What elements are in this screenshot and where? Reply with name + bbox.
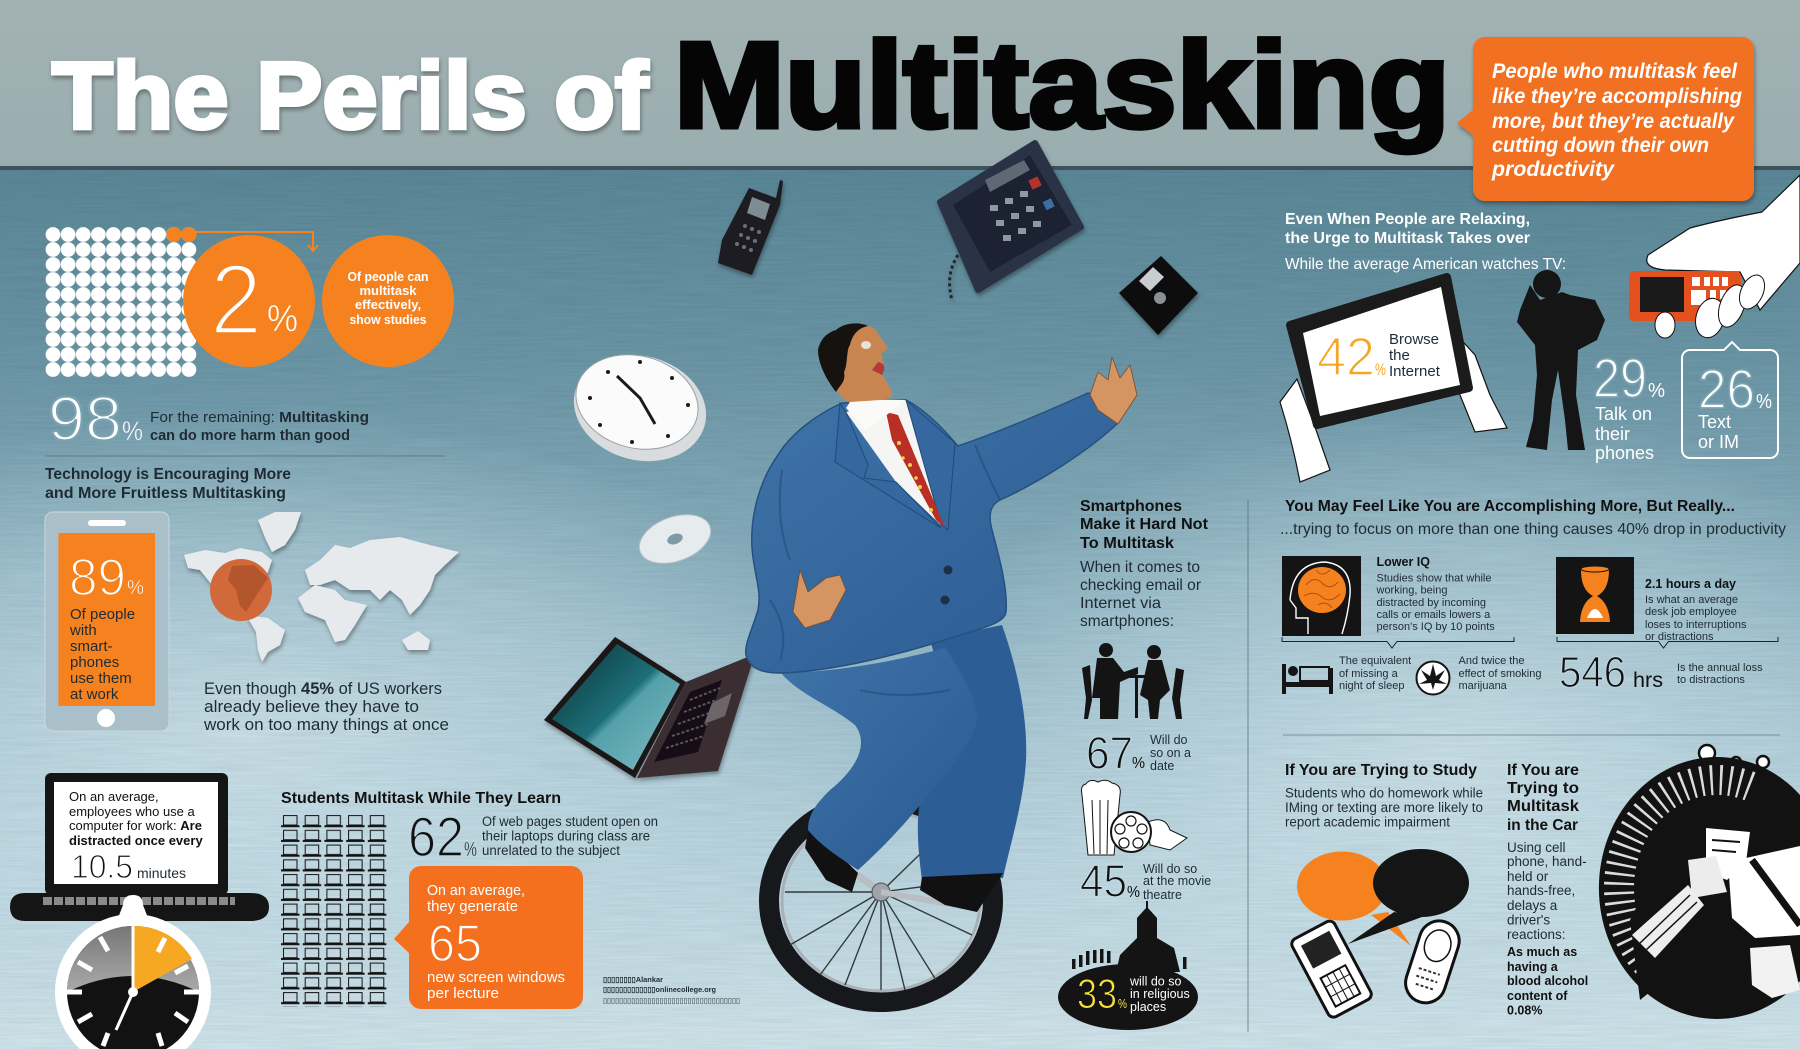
98 percent: % <box>122 416 143 446</box>
panel: multitask in the car: Multitask <box>1507 798 1579 815</box>
panel: smartphones: checking email or <box>1080 577 1202 594</box>
panel: multitask in the car: delays a <box>1507 898 1558 913</box>
bracket <box>1557 637 1778 648</box>
buttons <box>940 566 952 604</box>
stat: 45 percent: 45 <box>1080 856 1127 906</box>
stat: 26 percent box: % <box>1756 391 1772 413</box>
icon: smartphone 89 percent: use them <box>70 670 132 687</box>
icon: popcorn and film reel <box>1082 780 1187 855</box>
credits: ▯▯▯▯▯▯▯▯▯▯▯▯▯▯▯▯▯▯▯▯▯▯▯▯▯▯▯▯▯▯▯▯▯▯ <box>603 996 740 1005</box>
text: 2.1 hours a day <box>1645 577 1747 643</box>
callout: people who multitask: productivity <box>1491 158 1615 181</box>
stat: 546 hrs: to distractions <box>1677 674 1745 686</box>
panel: multitask in the car: If You are <box>1507 762 1579 779</box>
icon: laptop distraction: 10.5 <box>71 848 133 885</box>
back leg <box>918 625 1026 880</box>
panel: students multitask <box>281 790 658 1009</box>
stat: 29 percent <box>1593 347 1665 463</box>
icon: tablet with hands: Internet <box>1389 363 1441 380</box>
panel: multitask in the car: hands-free, <box>1507 883 1575 898</box>
text: 45 percent of US workers: work on too many things at once <box>203 715 449 734</box>
icon: smartphone 89 percent: with <box>69 622 97 639</box>
wheel <box>769 800 993 1002</box>
icon: laptop distraction <box>10 773 269 921</box>
tie <box>886 412 945 528</box>
icon: smartphone 89 percent: 89 <box>69 549 126 607</box>
text: missing sleep <box>1339 655 1411 692</box>
icon: smartphone 89 percent <box>45 512 169 731</box>
icon: tablet with hands: % <box>1375 360 1386 379</box>
icon: laptop distraction: computer for work: Are <box>69 818 202 833</box>
panel: technology heading: Technology is Encouraging More <box>45 466 291 483</box>
98 percent: For the remaining: Multitasking <box>150 409 369 426</box>
shirt <box>846 400 941 525</box>
icon: couple on a date <box>1082 643 1184 719</box>
dot grid <box>46 227 196 377</box>
circle: description: effectively, <box>355 297 421 312</box>
panel: technology heading: and More Fruitless Multitasking <box>45 485 286 502</box>
icon: church with stat 33 percent: will do so <box>1129 974 1181 988</box>
stat: 67 percent <box>1086 728 1191 778</box>
icon: stopwatch <box>55 895 211 1049</box>
stat: 45 percent: at the movie <box>1143 874 1211 888</box>
circle: 2%: 2 <box>210 244 262 356</box>
panel: trying to study: IMing or texting are more likely to <box>1285 800 1483 815</box>
icon: church with stat 33 percent: 33 <box>1077 970 1117 1017</box>
panel: students multitask: Students Multitask While They Learn <box>281 790 561 807</box>
panel: smartphones: When it comes to <box>1080 559 1200 576</box>
circle: 2%: % <box>267 298 298 340</box>
jacket <box>746 393 1119 673</box>
98 percent: 98 <box>48 385 122 454</box>
illustration: cell phone <box>718 180 783 275</box>
illustration: falling laptop <box>544 637 755 778</box>
title: Multitasking <box>674 17 1450 153</box>
panel: trying to study: report academic impairment <box>1285 814 1450 830</box>
stat: 45 percent: Will do so <box>1143 862 1197 876</box>
world map <box>184 512 459 662</box>
text: lower IQ <box>1376 555 1495 633</box>
icon: laptop distraction: minutes <box>137 865 186 881</box>
icon: speech bubbles and phones <box>1290 849 1469 1019</box>
text: smoking marijuana: marijuana <box>1458 680 1508 692</box>
icon: church with stat 33 percent: places <box>1130 1000 1166 1014</box>
62 percent: unrelated to the subject <box>482 843 620 858</box>
panel: multitask in the car: held or <box>1507 869 1549 884</box>
circle: description: show studies <box>350 312 426 327</box>
callout: people who multitask: like they’re accomplishing <box>1492 85 1742 108</box>
callout: 65 windows: they generate <box>427 898 518 915</box>
illustration: juggling man on unicycle <box>746 323 1137 1002</box>
text: 45 percent of US workers <box>203 679 449 734</box>
panel: smartphones: smartphones: <box>1080 613 1174 630</box>
panel: multitask in the car: 0.08% <box>1507 1004 1542 1018</box>
icon: tablet with hands: Browse <box>1389 331 1439 348</box>
panel: smartphones: To Multitask <box>1080 535 1174 552</box>
text: 2.1 hours a day: or distractions <box>1645 631 1714 643</box>
callout: people who multitask: more, but they’re actually <box>1492 110 1735 133</box>
icon: church with stat 33 percent: in religious <box>1130 987 1190 1001</box>
icon: bed <box>1282 664 1333 694</box>
text: missing sleep: night of sleep <box>1339 680 1404 692</box>
icon: smartphone 89 percent: at work <box>70 686 119 703</box>
hands <box>793 357 1137 628</box>
stat: 546 hrs: hrs <box>1633 669 1663 692</box>
panel: multitask in the car: As much as <box>1507 945 1577 959</box>
text: 2.1 hours a day: desk job employee <box>1645 606 1737 618</box>
98 percent <box>48 385 369 454</box>
panel: 2 percent <box>46 227 454 454</box>
stat: 67 percent: 67 <box>1086 728 1133 778</box>
panel: technology heading <box>45 466 291 502</box>
panel: multitask in the car: phone, hand- <box>1507 854 1587 869</box>
stat: 67 percent: % <box>1132 755 1145 772</box>
globe <box>210 559 272 621</box>
title <box>52 17 1450 153</box>
icon: hourglass <box>1556 557 1634 634</box>
panel: smartphones <box>1058 498 1211 1030</box>
panel: relaxing heading <box>1285 211 1566 273</box>
panel: smartphones: Smartphones <box>1080 498 1182 515</box>
callout: people who multitask: People who multitask feel <box>1492 60 1738 83</box>
illustration: wall clock <box>562 340 718 476</box>
stat: 29 percent: % <box>1648 380 1665 402</box>
panel: smartphones: Internet via <box>1080 595 1161 612</box>
credits: ▯▯▯▯▯▯▯▯Alankar <box>603 975 663 984</box>
panel: trying to study <box>1285 762 1483 1019</box>
icon: church with stat 33 percent <box>1058 901 1198 1030</box>
panel: relaxing heading: While the average American watches TV: <box>1285 256 1566 273</box>
icon: laptop distraction: distracted once every <box>69 833 203 848</box>
shoes <box>805 832 1003 912</box>
bracket <box>1282 637 1514 648</box>
text: missing sleep: of missing a <box>1339 668 1399 680</box>
panel: multitask in the car: having a <box>1507 960 1559 974</box>
panel: accomplishing more: ...trying to focus on more than one thing causes 40% drop in productivity <box>1280 521 1786 538</box>
panel: accomplishing more <box>1280 498 1786 697</box>
text: 45 percent of US workers: already believe they have to <box>204 697 419 716</box>
panel: accomplishing more: You May Feel Like You are Accomplishing More, But Really... <box>1285 498 1735 515</box>
panel: relaxing heading: Even When People are Relaxing, <box>1285 211 1530 228</box>
illustration: desk phone <box>940 143 1081 300</box>
stat: 45 percent: % <box>1127 884 1140 901</box>
illustration: floppy disk <box>1119 256 1198 335</box>
callout: 65 windows: new screen windows <box>427 969 565 986</box>
icon: laptop distraction: On an average, <box>69 789 159 804</box>
credits <box>603 975 740 1005</box>
panel: multitask in the car: content of <box>1507 989 1568 1003</box>
stat: 67 percent: Will do <box>1150 733 1188 747</box>
panel: multitask in the car: reactions: <box>1507 927 1566 942</box>
text: smoking marijuana: effect of smoking <box>1458 668 1541 680</box>
stat: 45 percent <box>1080 856 1211 906</box>
text: 2.1 hours a day: loses to interruptions <box>1645 619 1747 631</box>
icon: smartphone 89 percent: Of people <box>70 606 135 623</box>
illustration: woodcut driver on phone <box>1599 745 1800 1019</box>
stat: 26 percent box: 26 <box>1698 358 1755 420</box>
stat: 29 percent: Talk on <box>1595 404 1652 424</box>
head <box>818 323 905 430</box>
callout: 65 windows: 65 <box>428 915 482 973</box>
panel: trying to study: If You are Trying to Study <box>1285 762 1477 779</box>
stat: 45 percent: theatre <box>1143 888 1182 902</box>
circle: description: multitask <box>359 283 417 298</box>
text: 2.1 hours a day: Is what an average <box>1645 594 1738 606</box>
icon: marijuana leaf <box>1416 662 1450 694</box>
panel: multitask in the car <box>1507 745 1800 1019</box>
lapels <box>835 400 955 530</box>
stat: 67 percent: so on a <box>1150 746 1191 760</box>
text: smoking marijuana: And twice the <box>1458 655 1525 667</box>
arrow <box>189 232 318 251</box>
callout: people who multitask: cutting down their own <box>1492 134 1709 157</box>
62 percent <box>408 805 658 868</box>
stat: 546 hrs: Is the annual loss <box>1677 662 1763 674</box>
98 percent: can do more harm than good <box>150 427 350 444</box>
icon: tablet with hands: the <box>1389 347 1410 364</box>
text: lower IQ: calls or emails lowers a <box>1376 609 1491 621</box>
stat: 29 percent: 29 <box>1593 347 1647 409</box>
illustration: compact disc <box>633 506 717 572</box>
panel: multitask in the car: Trying to <box>1507 780 1579 797</box>
callout: 65 windows <box>394 866 583 1009</box>
panel: trying to study: Students who do homework while <box>1285 786 1483 800</box>
circle: description: Of people can <box>348 269 429 284</box>
icon: tablet with hands: 42 <box>1317 327 1375 387</box>
text: 45 percent of US workers: Even though 45% of US workers <box>204 679 442 698</box>
text: lower IQ: Lower IQ <box>1376 555 1430 569</box>
callout: people who multitask <box>1457 37 1754 201</box>
text: lower IQ: distracted by incoming <box>1376 597 1486 609</box>
text: 2.1 hours a day: 2.1 hours a day <box>1645 577 1736 591</box>
panel: multitask in the car: Using cell <box>1507 840 1566 855</box>
text: lower IQ: working, being <box>1376 585 1447 597</box>
text: smoking marijuana <box>1458 655 1541 692</box>
stat: 29 percent: their <box>1595 424 1630 444</box>
62 percent: % <box>464 839 477 861</box>
credits: ▯▯▯▯▯▯▯▯▯▯▯▯▯onlinecollege.org <box>603 985 716 994</box>
62 percent: their laptops during class are <box>482 828 650 844</box>
stat: 67 percent: date <box>1150 759 1174 773</box>
suit fold lines <box>770 445 1000 695</box>
icon: smartphone 89 percent: smart- <box>70 638 112 655</box>
title: The Perils of <box>52 43 648 149</box>
icon: hand holding phone <box>1629 175 1800 341</box>
panel: multitask in the car: in the Car <box>1507 817 1578 834</box>
stat: 546 hrs <box>1559 648 1763 697</box>
panel: smartphones: Make it Hard Not <box>1080 516 1209 533</box>
icon: man on phone silhouette <box>1517 270 1605 450</box>
front leg <box>781 648 977 870</box>
circle: 2% <box>183 235 315 367</box>
icon: smartphone 89 percent: phones <box>70 654 119 671</box>
icon: laptop distraction: employees who use a <box>69 804 196 819</box>
62 percent: Of web pages student open on <box>482 814 658 829</box>
stat: 26 percent box <box>1682 342 1778 458</box>
icon: smartphone 89 percent: % <box>127 577 144 599</box>
callout: 65 windows: On an average, <box>427 882 525 899</box>
panel: relaxing heading: the Urge to Multitask Takes over <box>1285 230 1530 247</box>
text: missing sleep: The equivalent <box>1339 655 1411 667</box>
stat: 26 percent box: Text <box>1698 412 1731 432</box>
icon: church with stat 33 percent: % <box>1118 996 1127 1011</box>
stat: 26 percent box: or IM <box>1698 432 1739 452</box>
stat: 29 percent: phones <box>1595 443 1654 463</box>
text: lower IQ: Studies show that while <box>1376 573 1491 585</box>
stat: 546 hrs: 546 <box>1559 648 1626 697</box>
text: lower IQ: person's IQ by 10 points <box>1376 621 1495 633</box>
icon: tablet with hands <box>1280 277 1507 482</box>
panel: multitask in the car: blood alcohol <box>1507 974 1588 988</box>
panel: multitask in the car: driver's <box>1507 912 1550 928</box>
62 percent: 62 <box>408 805 464 868</box>
laptop grid <box>281 815 387 1007</box>
circle: description <box>322 235 454 367</box>
icon: brain <box>1282 556 1361 636</box>
callout: 65 windows: per lecture <box>427 985 499 1002</box>
